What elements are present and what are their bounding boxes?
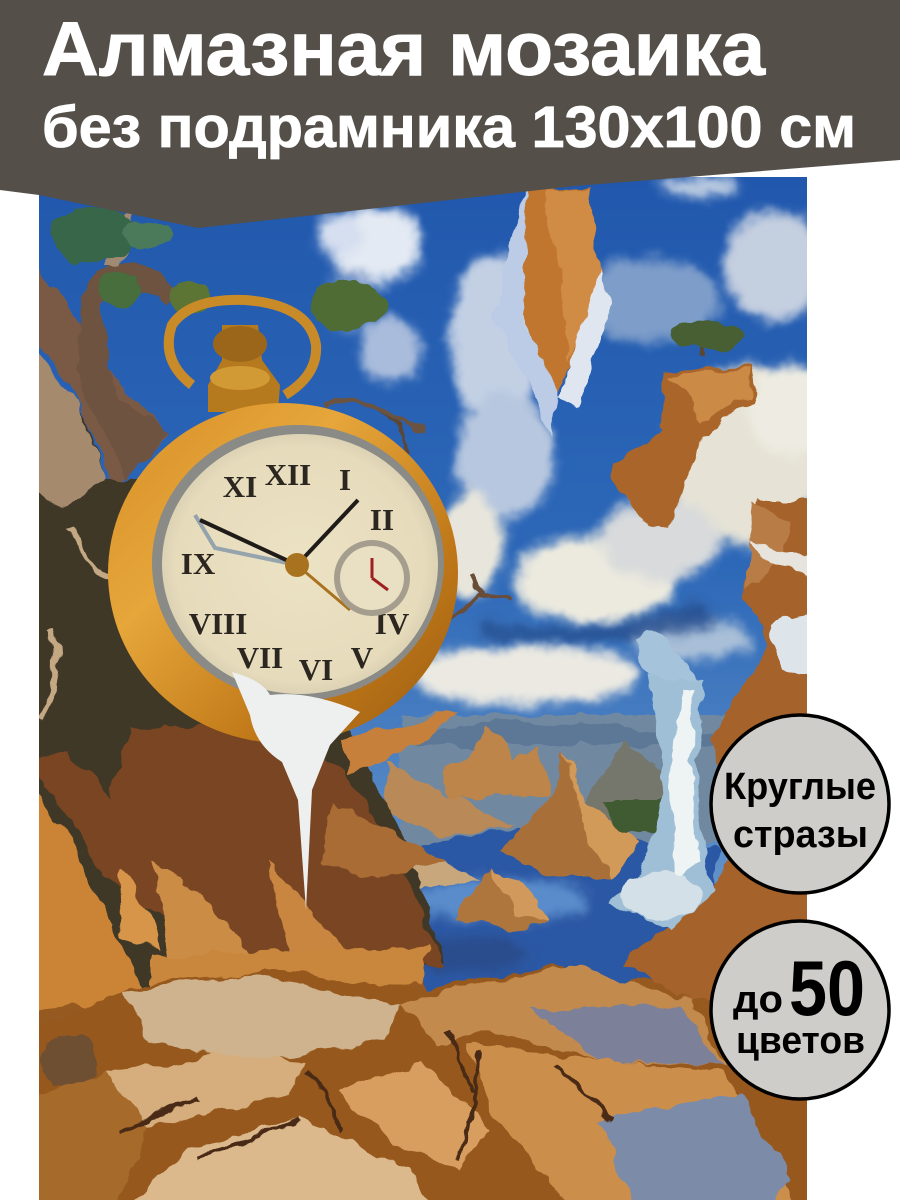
badge: round rhinestones [711,715,889,893]
cracked desert ground [20,965,825,1200]
floating rock with tree [612,320,755,530]
ground underlay [39,977,710,1029]
watch case [108,403,458,743]
twisted tree on the left [40,207,510,720]
badge: up to 50 colors: 50 [789,944,865,1032]
roman numerals: XII [265,457,311,492]
subtitle: без подрамника 130х100 см [42,95,856,160]
roman numerals: VII [237,640,283,675]
header band [0,0,900,228]
watch crown [208,325,280,412]
badge: up to 50 colors: цветов [736,1020,865,1062]
small dial [334,540,410,616]
roman numerals: II [370,502,394,537]
water [420,828,722,992]
horizon and distant mountains [385,715,740,845]
painting: surreal landscape with pocket watch [20,176,830,1200]
roman numerals: VI [299,652,333,687]
title: Алмазная мозаика [42,7,766,92]
roman numerals: I [339,462,351,497]
roman numerals [181,457,410,687]
clouds [318,176,830,705]
roman numerals: IV [375,606,410,641]
sky [39,177,807,957]
left dark cliff [30,250,170,490]
badge: up to 50 colors [711,921,889,1099]
right cliff [625,500,815,1010]
badge: up to 50 colors: до [733,979,783,1021]
roman numerals: IX [181,546,216,581]
watch bow [169,300,316,395]
badge: round rhinestones: стразы [733,814,868,856]
rock spires in the lake [455,750,640,932]
melting ice [232,672,360,910]
watch hands [195,515,297,565]
roman numerals: XI [223,469,257,504]
roman numerals: VIII [189,606,247,641]
badge: round rhinestones: Круглые [724,766,876,808]
roman numerals: V [351,640,374,675]
melting waterfall [610,632,715,930]
floating rock column [504,187,612,438]
watch face [162,434,438,694]
pocket watch [108,300,458,910]
